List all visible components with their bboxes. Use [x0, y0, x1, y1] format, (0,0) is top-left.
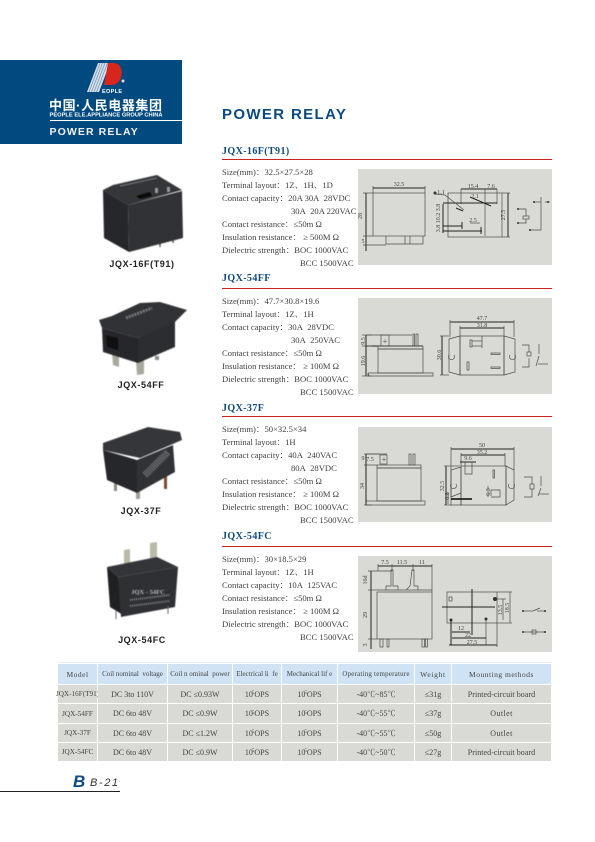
table row: JQX-16F(T91): DC ≤0.93W: [180, 690, 220, 698]
table row: JQX-54FC: DC ≤0.9W: [182, 748, 218, 756]
logo mark: striped P: EOPLE: [102, 89, 122, 95]
specifications: Dielectric strength：BOC 1000VAC: [222, 619, 348, 629]
product photo: JQX-37F: [102, 426, 183, 500]
dimension drawing: 28: [358, 213, 364, 219]
dimension drawing: 29: [363, 612, 369, 618]
specifications: Contact resistance：≤50m Ω: [222, 348, 322, 358]
table row: JQX-54FF: 10OPS: [297, 709, 322, 718]
table row: JQX-16F(T91): DC 3to 110V: [111, 690, 154, 698]
specifications: Contact resistance：≤50m Ω: [222, 476, 322, 486]
table row: JQX-54FC: DC 6to 48V: [113, 748, 152, 756]
table row: JQX-16F(T91): 5: [304, 691, 307, 696]
table header row: Operating temperature: [342, 670, 410, 678]
logo mark: striped P: [87, 63, 124, 95]
specifications: Size(mm)：47.7×30.8×19.6: [222, 296, 319, 306]
dimension drawing: 12: [458, 626, 464, 632]
specifications: Contact capacity：10A 125VAC: [222, 580, 337, 590]
section letter: B: [73, 772, 85, 791]
specifications: Contact capacity：30A 28VDC: [222, 322, 334, 332]
caption: JQX-54FF: JQX-54FF: [118, 380, 164, 390]
table row: JQX-54FF: 5: [304, 710, 307, 716]
dimension drawing: 3.8 10.2 3.8: [436, 204, 442, 232]
dimension drawing: 11.5: [397, 560, 407, 566]
table row: JQX-54FF: 10OPS: [245, 709, 269, 718]
table row: JQX-54FC: ≤27g: [425, 748, 441, 756]
specifications table: [56, 662, 552, 761]
specifications: Terminal layout：1Z、1H: [222, 309, 314, 319]
table header row: Weight: [420, 670, 446, 678]
dimension drawing: 15.4: [468, 184, 478, 190]
table row: JQX-37F: 5: [304, 730, 307, 735]
banner subtitle: POWER RELAY: [50, 126, 139, 138]
dimension drawing: 9.6: [464, 456, 472, 462]
table row: JQX-16F(T91): JQX-16F(T91): [56, 690, 99, 698]
table header row: Mechanical lif e: [287, 670, 332, 678]
specifications: Dielectric strength：BOC 1000VAC: [222, 245, 348, 255]
dimension drawing: [358, 556, 552, 652]
table row: JQX-37F: DC ≤1.2W: [182, 728, 218, 738]
table row: JQX-37F: JQX-37F: [64, 729, 91, 737]
table row: JQX-16F(T91): ≤31g: [425, 690, 441, 698]
table row: JQX-37F: DC 6to 48V: [113, 728, 152, 738]
dimension drawing: 3: [363, 644, 369, 646]
table row: JQX-54FC: -40℃~50℃: [356, 748, 396, 756]
specifications: [222, 554, 354, 642]
specifications: Contact capacity：20A 30A 28VDC: [222, 193, 350, 203]
table row: JQX-54FC: 5: [304, 749, 307, 754]
dimension drawing: 19.6: [361, 356, 367, 366]
table row: JQX-54FC: Printed-circuit board: [468, 748, 535, 756]
caption: JQX-54FC: JQX-54FC: [118, 635, 166, 645]
section: JQX-37F: [222, 403, 552, 525]
specifications: 30A 250VAC: [291, 335, 340, 345]
table row: JQX-54FF: DC ≤0.9W: [182, 709, 218, 718]
heading: JQX-37F: [222, 403, 264, 414]
dimension drawing: 13.5: [498, 605, 504, 615]
caption: JQX-37F: JQX-37F: [121, 506, 161, 516]
product photo: JQX-54FC: JQX - 54FC: [131, 589, 165, 596]
specifications: [222, 167, 356, 268]
specifications: Dielectric strength：BOC 1000VAC: [222, 502, 348, 512]
specifications: [222, 296, 354, 397]
table row: JQX-37F: 10OPS: [245, 728, 269, 738]
dimension drawing: 35.2: [477, 450, 487, 456]
dimension drawing: 2.1: [471, 194, 479, 200]
caption: JQX-16F(T91): JQX-16F(T91): [109, 259, 175, 269]
product photo: JQX-54FF: [98, 301, 188, 376]
dimension drawing: 31.8: [477, 323, 487, 329]
dimension drawing: 9.5: [361, 337, 367, 345]
table row: JQX-37F: Outlet: [490, 728, 513, 738]
table row: JQX-37F: 10OPS: [297, 728, 322, 738]
table row: JQX-37F: -40℃~55℃: [356, 728, 396, 738]
product photo: JQX-16F(T91): [102, 174, 184, 253]
table row: JQX-54FF: DC 6to 48V: [113, 709, 152, 718]
dimension drawing: 7.5: [381, 560, 389, 566]
table row: JQX-37F: [58, 724, 551, 742]
dimension drawing: 7.5: [366, 457, 374, 463]
section: JQX-16F(T91): [222, 146, 552, 268]
dimension drawing: 50: [479, 443, 485, 449]
specifications: Size(mm)：50×32.5×34: [222, 424, 306, 434]
dimension drawing: [358, 169, 552, 265]
specifications: BCC 1500VAC: [300, 632, 354, 642]
table header row: Electrical li fe: [236, 670, 278, 678]
dimension drawing: +: [383, 337, 388, 346]
table row: JQX-16F(T91): 10OPS: [297, 690, 322, 698]
specifications: Contact capacity：40A 240VAC: [222, 450, 337, 460]
table row: JQX-37F: ≤50g: [425, 728, 441, 738]
table header row: Model: [66, 670, 89, 678]
page number: B-21: [90, 777, 120, 789]
heading: JQX-54FC: [222, 531, 272, 542]
company name: 中国·人民电器集团: [49, 98, 162, 113]
dimension drawing: 30.6: [437, 350, 443, 360]
dimension drawing: 0.8: [445, 492, 451, 500]
dimension drawing: 18.5: [505, 603, 511, 613]
specifications: Terminal layout：1Z、1H、1D: [222, 180, 333, 190]
table row: JQX-54FC: [58, 743, 551, 761]
table header row: [58, 664, 551, 684]
dimension drawing: 11: [419, 560, 425, 566]
table row: JQX-16F(T91): Printed-circuit board: [468, 690, 535, 698]
company name in English: PEOPLE ELE.APPLIANCE GROUP CHINA: [50, 112, 163, 118]
table row: JQX-54FF: JQX-54FF: [62, 710, 93, 718]
table row: JQX-54FF: ≤37g: [425, 709, 441, 718]
specifications: 30A 20A 220VAC: [291, 206, 356, 216]
dimension drawing: [358, 427, 552, 522]
specifications: Size(mm)：32.5×27.5×28: [222, 167, 313, 177]
specifications: BCC 1500VAC: [300, 258, 354, 268]
dimension drawing: 47.7: [477, 316, 487, 322]
specifications: Terminal layout：1Z、1H: [222, 567, 314, 577]
table row: JQX-16F(T91): 5: [252, 691, 254, 696]
table row: JQX-54FF: 5: [252, 710, 254, 716]
specifications: 80A 28VDC: [291, 463, 337, 473]
heading: JQX-54FF: [222, 273, 271, 284]
dimension drawing: 32.5: [394, 182, 404, 188]
table row: JQX-16F(T91): [56, 685, 551, 703]
table row: JQX-16F(T91): -40℃~85℃: [356, 690, 396, 698]
table row: JQX-54FF: -40℃~55℃: [356, 709, 396, 718]
specifications: Insulation resistance： ≥ 100M Ω: [222, 606, 339, 616]
specifications: Insulation resistance： ≥ 500M Ω: [222, 232, 339, 242]
table row: JQX-54FF: Outlet: [490, 709, 513, 718]
dimension drawing: 7.6: [487, 184, 495, 190]
dimension drawing: 32.5: [440, 481, 446, 491]
table row: JQX-54FC: 10OPS: [245, 748, 269, 756]
specifications: Contact resistance：≤50m Ω: [222, 219, 322, 229]
section: JQX-54FC: [222, 531, 552, 652]
dimension drawing: 9: [362, 456, 364, 462]
dimension drawing: 5: [362, 239, 364, 245]
table header row: Mounting methods: [469, 670, 534, 678]
dimension drawing: 6.3: [486, 488, 492, 496]
specifications: Insulation resistance： ≥ 100M Ω: [222, 361, 339, 371]
dimension drawing: 27.5: [467, 640, 477, 646]
table row: JQX-54FF: [58, 704, 551, 723]
dimension drawing: 34: [360, 483, 366, 489]
specifications: [222, 424, 354, 525]
header banner with logo: [0, 60, 182, 144]
table row: JQX-54FC: 10OPS: [297, 748, 322, 756]
specifications: BCC 1500VAC: [300, 515, 354, 525]
specifications: Dielectric strength：BOC 1000VAC: [222, 374, 348, 384]
footer page marker: [0, 772, 120, 792]
table header row: Coil n ominal power: [170, 670, 230, 678]
specifications: Size(mm)：30×18.5×29: [222, 554, 306, 564]
product photo: JQX-54FC: [106, 542, 179, 620]
page title: POWER RELAY: [222, 106, 347, 123]
table row: JQX-16F(T91): 10OPS: [245, 690, 269, 698]
specifications: Contact resistance：≤50m Ω: [222, 593, 322, 603]
specifications: Terminal layout：1H: [222, 437, 296, 447]
dimension drawing: 1.1: [437, 190, 445, 196]
table row: JQX-37F: 5: [252, 730, 254, 735]
specifications: Insulation resistance： ≥ 100M Ω: [222, 489, 339, 499]
dimension drawing: 22: [465, 633, 471, 639]
table row: JQX-54FC: 5: [252, 749, 254, 754]
specifications: BCC 1500VAC: [300, 387, 354, 397]
dimension drawing: +: [382, 455, 387, 464]
table header row: Coil nominal voltage: [102, 670, 163, 678]
table row: JQX-54FC: JQX-54FC: [62, 748, 93, 756]
dimension drawing: [358, 298, 552, 394]
dimension drawing: 27.5: [501, 210, 507, 220]
dimension drawing: 2.5: [469, 218, 477, 224]
dimension drawing: 16d: [363, 576, 369, 584]
heading: JQX-16F(T91): [222, 146, 290, 157]
section: JQX-54FF: [222, 273, 552, 397]
